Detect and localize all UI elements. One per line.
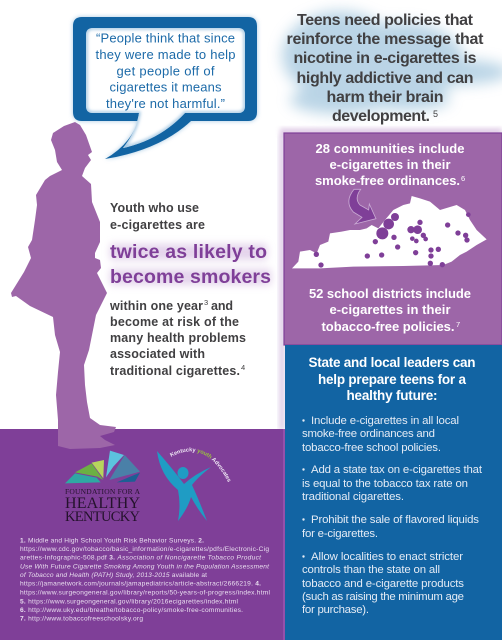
bullet: state tax: Add a state tax on e-cigarettes that (311, 464, 483, 476)
text: within one year: associated with (110, 347, 205, 361)
panel text: communities: 6 (461, 174, 465, 183)
footnotes: arettes-Infographic-508.pdf 3. Association of Noncigarette Tobacco Product (20, 555, 262, 562)
highlight: twice as likely: become smokers (110, 266, 271, 288)
quote text (96, 30, 236, 111)
logo: Foundation for a Healthy Kentucky: KENTUCKY (65, 509, 141, 525)
footnotes: https://www.cdc.gov/tobacco/basic_information/e-cigarettes/pdfs/Electronic-Cig (20, 546, 269, 553)
bullet: include e-cigarettes: smoke-free ordinances and (302, 428, 435, 440)
text: within one year: become at risk of the (110, 315, 239, 329)
text: within one year: 4 (241, 363, 245, 372)
panel text: communities: smoke-free ordinances. (315, 173, 460, 188)
bullet: prohibit flavors: Prohibit the sale of flavored liquids (311, 514, 479, 526)
bullet: prohibit flavors: for e-cigarettes. (302, 528, 378, 540)
silhouette of teen (11, 122, 116, 449)
footnotes (20, 537, 271, 623)
purple footer band (0, 429, 285, 640)
bullet: state tax: is equal to the tobacco tax rate on (302, 478, 468, 490)
logo: Kentucky Youth Advocates (157, 447, 230, 521)
title: teens need policies: Teens need policies that (297, 12, 474, 29)
title: teens need policies: reinforce the message that (286, 31, 484, 48)
icon: curved arrow (349, 189, 376, 224)
logo: Kentucky Youth Advocates: Kentucky youth Advocates (170, 447, 230, 482)
text: youth who use e-cigarettes (110, 201, 205, 232)
bullet: stricter controls: for purchase). (302, 604, 369, 616)
text: within one year (109, 298, 246, 378)
logo: Foundation for a Healthy Kentucky (65, 451, 141, 525)
footnotes: https://www.surgeongeneral.gov/library/reports/50-years-of-progress/index.html (20, 589, 271, 596)
panel text: communities (315, 141, 465, 188)
title: teens need policies: highly addictive and can (296, 70, 474, 87)
quote text: they're not harmful.” (106, 96, 225, 111)
heading: state and local leaders: help prepare teens for a (318, 372, 466, 387)
panel text: school districts: e-cigarettes in their (330, 302, 450, 317)
highlight: twice as likely (110, 241, 271, 288)
title: teens need policies: nicotine in e-cigarettes is (294, 50, 477, 67)
bullet: include e-cigarettes: tobacco-free school policies. (302, 442, 441, 454)
map of Kentucky with dots (292, 189, 487, 268)
bullet: prohibit flavors (302, 514, 479, 540)
footnotes: 6. http://www.uky.edu/breathe/tobacco-policy/smoke-free-communities. (20, 607, 243, 614)
bullet: stricter controls: controls than the state on all (302, 564, 440, 576)
footnotes: 1. Middle and High School Youth Risk Behavior Surveys. 2. (20, 537, 204, 544)
quote text: get people off of (116, 64, 215, 78)
text: within one year: many health problems (110, 331, 246, 345)
footnotes: of Tobacco and Health (PATH) Study, 2013-2015 available at (20, 572, 207, 579)
heading: state and local leaders: healthy future: (346, 388, 438, 403)
bullet: include e-cigarettes (302, 415, 459, 454)
title: teens need policies (286, 12, 484, 125)
text: youth who use e-cigarettes: Youth who use (110, 201, 199, 215)
logo: Foundation for a Healthy Kentucky: HEALTHY (65, 495, 140, 512)
bullet: stricter controls (302, 551, 464, 616)
text: within one year: traditional cigarettes. (110, 364, 240, 378)
title: teens need policies: development. (332, 108, 430, 125)
panel: blue recommendations (283, 345, 502, 640)
background blue cloud behind heading (282, 11, 502, 114)
bullet: stricter controls: tobacco and e-cigarette products (302, 578, 464, 590)
highlight: twice as likely: twice as likely to (110, 241, 267, 263)
quote text: they were made to help (96, 47, 236, 62)
quote text: “People think that since (96, 30, 235, 46)
bullet: stricter controls: (such as raising the minimum age (302, 591, 464, 603)
bullet: include e-cigarettes: Include e-cigarettes in all local (311, 415, 459, 427)
panel: purple map panel (280, 128, 502, 345)
quote text: cigarettes it means (110, 80, 222, 94)
panel text: school districts: 7 (456, 320, 460, 329)
title: teens need policies: harm their brain (326, 89, 444, 106)
text: within one year: within one year (109, 299, 203, 313)
text: within one year: 3 (204, 298, 208, 307)
title: teens need policies: 5 (433, 109, 438, 119)
bullet: stricter controls: Allow localities to enact stricter (311, 551, 463, 563)
heading: state and local leaders: State and local leaders can (308, 355, 476, 370)
panel text: school districts: 52 school districts include (309, 286, 471, 301)
footnotes: Use With Future Cigarette Smoking Among Youth in the Population Assessment (20, 563, 270, 570)
panel text: communities: 28 communities include (316, 141, 464, 156)
text: within one year: and (211, 299, 233, 313)
footnotes: 7. http://www.tobaccofreeschoolsky.org (20, 616, 143, 623)
footnotes: 5. https://www.surgeongeneral.gov/library/2016ecigarettes/index.html (20, 598, 239, 605)
speech bubble (73, 17, 257, 159)
logo: Foundation for a Healthy Kentucky: FOUNDATION FOR A (65, 487, 141, 496)
footnotes: https://jamanetwork.com/journals/jamapediatrics/article-abstract/2666219. 4. (20, 581, 261, 588)
heading: state and local leaders (308, 355, 476, 403)
text: youth who use e-cigarettes: e-cigarettes are (110, 218, 205, 232)
panel text: communities: e-cigarettes in their (330, 157, 450, 172)
bullet: state tax (302, 464, 483, 503)
bullet: state tax: traditional cigarettes. (302, 491, 404, 503)
panel text: school districts: tobacco-free policies. (322, 319, 454, 334)
panel text: school districts (309, 286, 471, 334)
